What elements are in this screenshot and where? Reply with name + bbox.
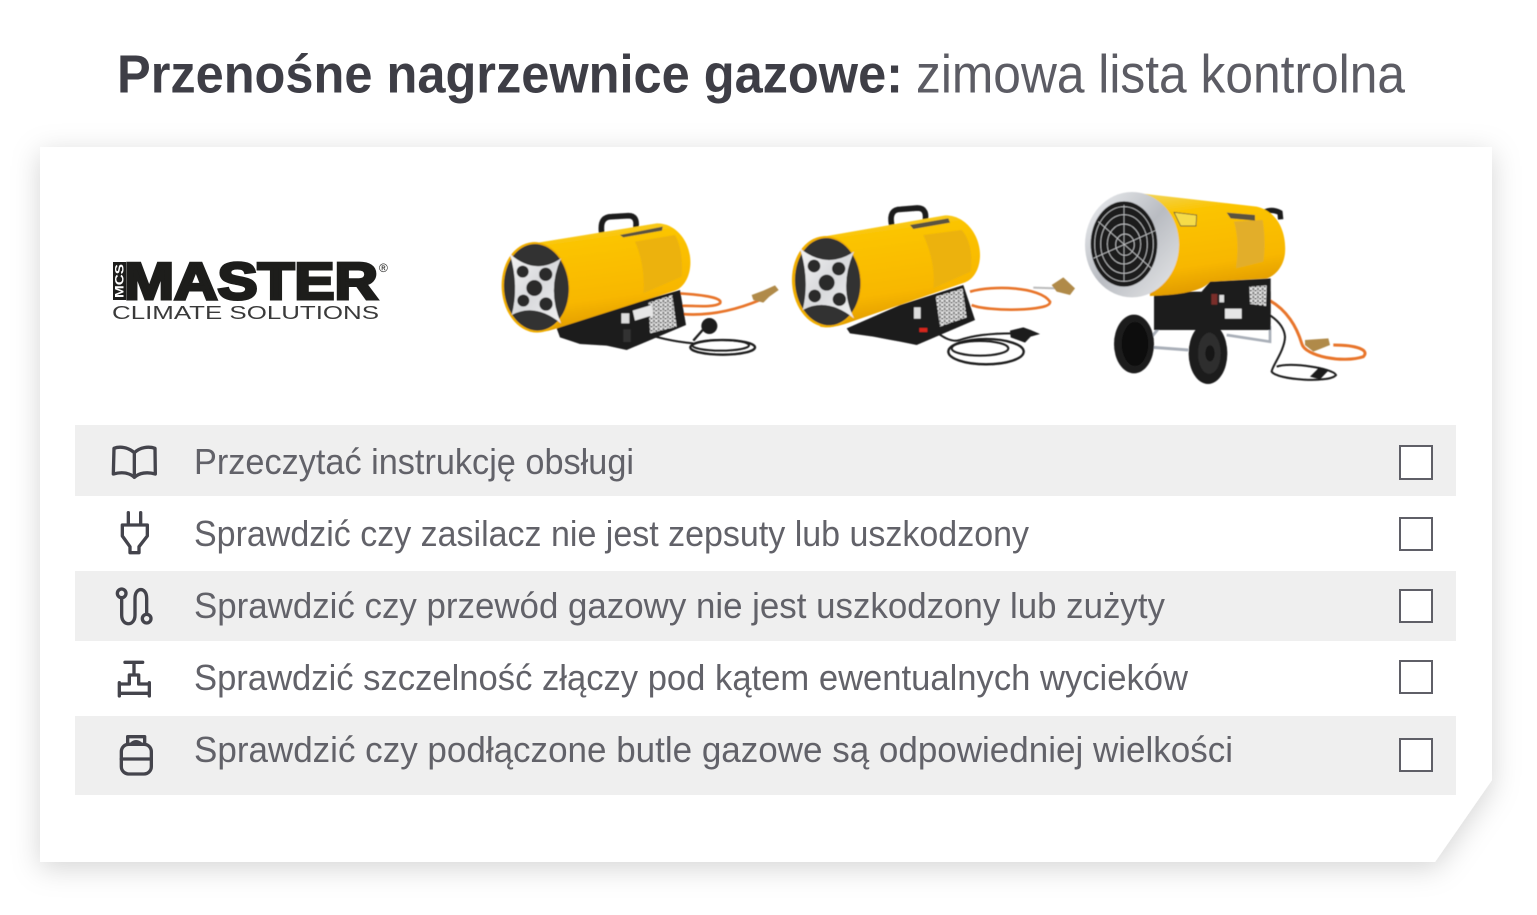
product photo: small gas heater — [499, 216, 779, 355]
icon: pipe valve — [119, 662, 149, 696]
checklist row 5: Sprawdzić czy podłączone butle gazowe są odpowiedniej wielkości — [194, 729, 1233, 770]
title: zimowa lista kontrolna — [916, 44, 1406, 104]
logo: Master Climate Solutions: MASTER — [124, 253, 378, 311]
logo: Master Climate Solutions — [112, 253, 388, 323]
product photo: medium gas heater — [789, 208, 1075, 364]
checklist row 2: Sprawdzić czy zasilacz nie jest zepsuty lub uszkodzony — [194, 513, 1029, 554]
logo: Master Climate Solutions: MCS — [114, 264, 126, 298]
product photo: large wheeled gas heater — [1085, 192, 1365, 384]
title: Przenośne nagrzewnice gazowe: — [117, 44, 903, 104]
icon: power plug — [122, 513, 147, 553]
checklist row 2 — [122, 513, 1432, 554]
icon: gas cylinder — [121, 737, 151, 774]
logo: Master Climate Solutions: ® — [379, 261, 388, 275]
checklist row 5 — [75, 716, 1456, 795]
icon: open book — [113, 447, 155, 477]
checklist row 3 — [75, 571, 1456, 641]
checklist row 3: Sprawdzić czy przewód gazowy nie jest uszkodzony lub zużyty — [194, 585, 1165, 626]
panel: checklist card — [40, 147, 1492, 862]
title — [117, 44, 1406, 104]
icon: gas hose — [117, 589, 151, 624]
checklist row 1: Przeczytać instrukcję obsługi — [194, 441, 634, 482]
logo: Master Climate Solutions: CLIMATE SOLUTIONS — [112, 302, 379, 323]
checklist row 1 — [75, 425, 1456, 496]
checklist row 4: Sprawdzić szczelność złączy pod kątem ewentualnych wycieków — [194, 657, 1189, 698]
